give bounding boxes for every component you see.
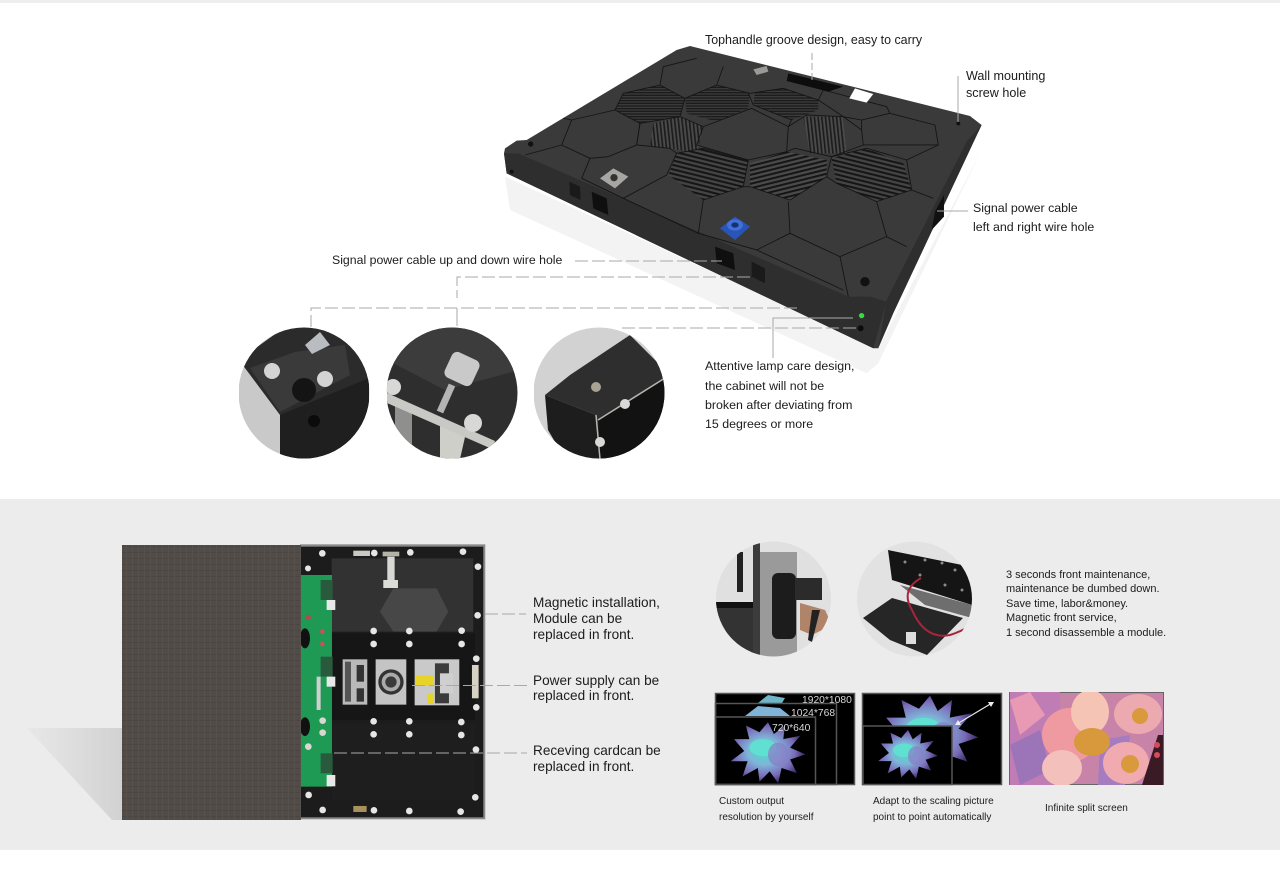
- caption: custom output: resolution by yourself: [719, 812, 814, 823]
- white notch: [849, 88, 873, 103]
- label: magnetic installation: replaced in front.: [533, 627, 634, 642]
- screw dots: [305, 548, 481, 815]
- circle photo: cabinet corner: [534, 327, 665, 459]
- label: receiving card: replaced in front.: [533, 759, 634, 774]
- circle photo: module suction tool: [716, 541, 832, 657]
- tile: custom resolution: [716, 694, 854, 784]
- open cabinet photo: [300, 544, 485, 819]
- label: front maintenance: 1 second disassemble a module.: [1006, 627, 1166, 639]
- caption: adapt scaling: point to point automatically: [873, 812, 991, 823]
- label: front maintenance: Save time, labor&money.: [1006, 598, 1128, 610]
- tile: custom resolution: 1920*1080: [802, 695, 852, 706]
- label: magnetic installation: Module can be: [533, 611, 622, 626]
- label: top handle: Tophandle groove design, easy to carry: [705, 33, 923, 47]
- callout lines: top panel: [311, 53, 968, 358]
- silver latch: [753, 66, 768, 75]
- circle photo: corner screw: [239, 327, 370, 459]
- circle photo: opened module: [857, 541, 973, 657]
- cabinet photo: [504, 46, 982, 373]
- label: left right wire hole: left and right wire hole: [973, 220, 1094, 234]
- label: front maintenance: 3 seconds front maintenance,: [1006, 569, 1150, 581]
- top strip: [0, 0, 1280, 3]
- label: power supply: Power supply can be: [533, 673, 659, 688]
- vents: [615, 85, 685, 123]
- power supply: [343, 659, 367, 705]
- callout lines: front panel: [334, 614, 527, 753]
- lamp: [859, 313, 864, 318]
- top connector: [353, 551, 370, 556]
- label: lamp care design: the cabinet will not be: [705, 379, 824, 393]
- label: left right wire hole: Signal power cable: [973, 201, 1078, 215]
- label: lamp care design: Attentive lamp care design,: [705, 359, 854, 373]
- label: power supply: replaced in front.: [533, 688, 634, 703]
- blue plug: [720, 217, 750, 240]
- label: lamp care design: 15 degrees or more: [705, 417, 813, 431]
- caption: adapt scaling: Adapt to the scaling picture: [873, 796, 994, 807]
- label: lamp care design: broken after deviating from: [705, 398, 852, 412]
- LED module: [122, 545, 301, 820]
- caption: custom output: Custom output: [719, 796, 784, 807]
- label: receiving card: Receving cardcan be: [533, 743, 661, 758]
- floor shadow: [27, 728, 122, 820]
- circle photo: locking pin: [385, 327, 520, 459]
- label: magnetic installation: Magnetic installation,: [533, 595, 660, 610]
- front openings: [592, 192, 608, 215]
- caption: split screen: Infinite split screen: [1045, 803, 1128, 814]
- panel: front service: [0, 499, 1280, 850]
- tile: infinite split screen: [1010, 690, 1164, 786]
- panel: rear cabinet features: [0, 3, 1280, 499]
- tile: custom resolution: 1024*768: [791, 708, 835, 719]
- label: wall mounting: screw hole: [966, 86, 1026, 100]
- tile: custom resolution: 720*640: [772, 723, 811, 734]
- label: front maintenance: Magnetic front service,: [1006, 612, 1117, 624]
- handle slot: [787, 73, 843, 92]
- label: front maintenance: maintenance be dumbed down.: [1006, 583, 1160, 595]
- label: wall mounting: Wall mounting: [966, 69, 1045, 83]
- label: up down wire hole: Signal power cable up and down wire hole: [332, 253, 563, 267]
- green receiving board: [300, 575, 332, 787]
- tile: scaling picture: [862, 694, 1002, 784]
